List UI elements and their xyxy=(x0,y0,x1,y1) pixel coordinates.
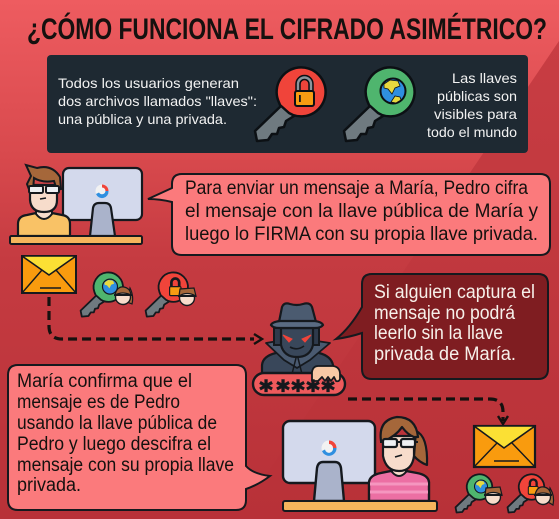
text: explanation right: todo el mundo xyxy=(427,124,517,140)
speech bubble: María: usando la llave pública de xyxy=(17,413,217,434)
speech bubble: spy: Si alguien captura el xyxy=(374,282,535,303)
speech bubble: spy: leerlo sin la llave xyxy=(374,323,503,344)
icon: green public key xyxy=(344,67,415,141)
text: explanation right xyxy=(427,70,517,140)
text: explanation left: Todos los usuarios generan xyxy=(58,75,239,91)
monitor xyxy=(283,421,375,501)
text: explanation left: una pública y una privada. xyxy=(58,111,227,127)
illustration: Pedro at computer xyxy=(10,165,142,244)
speech bubble: spy: mensaje no podrá xyxy=(374,303,515,324)
arrow: spy to envelope xyxy=(348,399,508,424)
speech bubble: María: privada. xyxy=(17,475,81,496)
illustration: María at computer xyxy=(283,417,437,511)
speech bubble: spy xyxy=(336,274,548,379)
person: María xyxy=(369,417,429,501)
speech bubble: Pedro: el mensaje con la llave pública de María y xyxy=(185,201,538,222)
speech bubble: María: mensaje es de Pedro xyxy=(17,392,180,413)
speech bubble: Pedro xyxy=(148,174,550,255)
speech bubble: María: María confirma que el xyxy=(17,371,192,392)
desk xyxy=(283,501,437,511)
text: explanation right: visibles para xyxy=(434,106,517,122)
desk xyxy=(10,236,142,244)
speech bubble: Pedro: luego lo FIRMA con su propia llave privada. xyxy=(185,224,538,245)
text: explanation right: públicas son xyxy=(437,88,517,104)
icon: red private key xyxy=(255,67,326,141)
speech bubble: spy: privada de María. xyxy=(374,344,516,365)
icon: public key of María xyxy=(81,272,133,317)
monitor xyxy=(63,168,142,236)
text: explanation left xyxy=(58,75,257,127)
text: explanation right: Las llaves xyxy=(452,70,517,86)
speech bubble: María xyxy=(8,365,270,510)
arrow: envelope to spy xyxy=(49,297,262,344)
speech bubble: Pedro: Para enviar un mensaje a María, Pedro cifra xyxy=(185,178,528,199)
icon: envelope received xyxy=(474,426,535,467)
icon: private key of Pedro xyxy=(146,272,196,317)
text: explanation left: dos archivos llamados "llaves": xyxy=(58,93,257,109)
icon: private key of María xyxy=(508,474,554,513)
speech bubble: María: mensaje con su propia llave xyxy=(17,455,234,476)
icon: public key of Pedro xyxy=(456,474,502,513)
panel: llaves xyxy=(47,55,528,153)
speech bubble: María: Pedro y luego descifra el xyxy=(17,434,211,455)
person: Pedro xyxy=(18,165,70,236)
password field: ***** xyxy=(260,376,335,404)
icon: envelope sent xyxy=(22,256,76,293)
illustration: spy xyxy=(253,303,345,404)
